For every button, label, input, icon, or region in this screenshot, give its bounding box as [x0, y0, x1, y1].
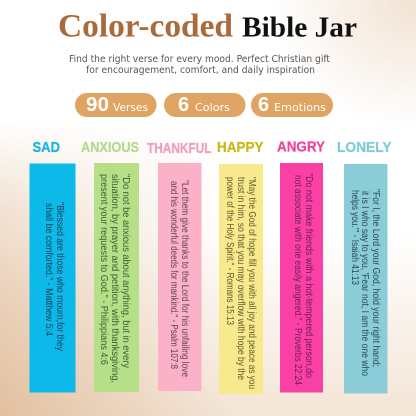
title — [58, 8, 357, 44]
strip: lonely — [344, 164, 388, 394]
strip: thankful — [158, 163, 202, 391]
strip: happy: power of the Holy Spirit." - Romans 15:13 — [224, 177, 236, 325]
stat pill: 90 verses: 90 — [86, 94, 109, 116]
strip: angry: "Do not make friends with a hot-tempered person,do — [303, 173, 315, 378]
stat pill: 90 verses: Verses — [113, 101, 148, 114]
strip: lonely: "For I, the Lord your God, hold your right hand; — [370, 189, 382, 367]
heading: sad: SAD — [32, 139, 60, 156]
title: Bible Jar — [242, 12, 357, 44]
strip: lonely: helps you.'" - Isaiah 41:13 — [349, 190, 361, 285]
title: Color-coded — [58, 8, 233, 44]
subtitle: for encouragement, comfort, and daily inspiration — [86, 65, 315, 76]
strip: anxious: situation, by prayer and petition, with thanksgiving, — [109, 174, 121, 383]
stat pill: 6 colors: Colors — [195, 101, 230, 114]
strip: sad — [30, 164, 76, 392]
heading: lonely: LONELY — [337, 139, 392, 156]
strip: lonely: it is I who say to you, 'Fear not, I am the one who — [359, 191, 371, 376]
subtitle — [69, 54, 330, 76]
stat pill: 6 colors: 6 — [178, 94, 189, 116]
heading: happy: HAPPY — [217, 139, 264, 156]
strip: sad: "Blessed are those who mourn,for they — [54, 202, 66, 352]
heading: anxious: ANXIOUS — [81, 139, 139, 156]
heading: thankful: THANKFUL — [147, 140, 212, 157]
stat pill: 6 emotions: 6 — [258, 94, 269, 116]
strip: happy — [219, 164, 263, 394]
stat pill: 90 verses — [75, 93, 156, 117]
strip: angry — [280, 163, 323, 392]
strip: sad: shall be comforted." - Matthew 5:4 — [43, 203, 55, 336]
heading: angry: ANGRY — [277, 138, 325, 156]
strip: anxious: "Do not be anxious about anything, but in every — [120, 174, 132, 369]
stat pill: 6 emotions — [251, 93, 333, 117]
stat pill: 6 colors — [164, 93, 246, 117]
stat pill: 6 emotions: Emotions — [274, 101, 326, 114]
strip: anxious: present your requests to God." - Philippians 4:6 — [98, 174, 110, 365]
strip: anxious — [94, 163, 139, 392]
subtitle: Find the right verse for every mood. Perfect Christian gift — [69, 54, 330, 65]
